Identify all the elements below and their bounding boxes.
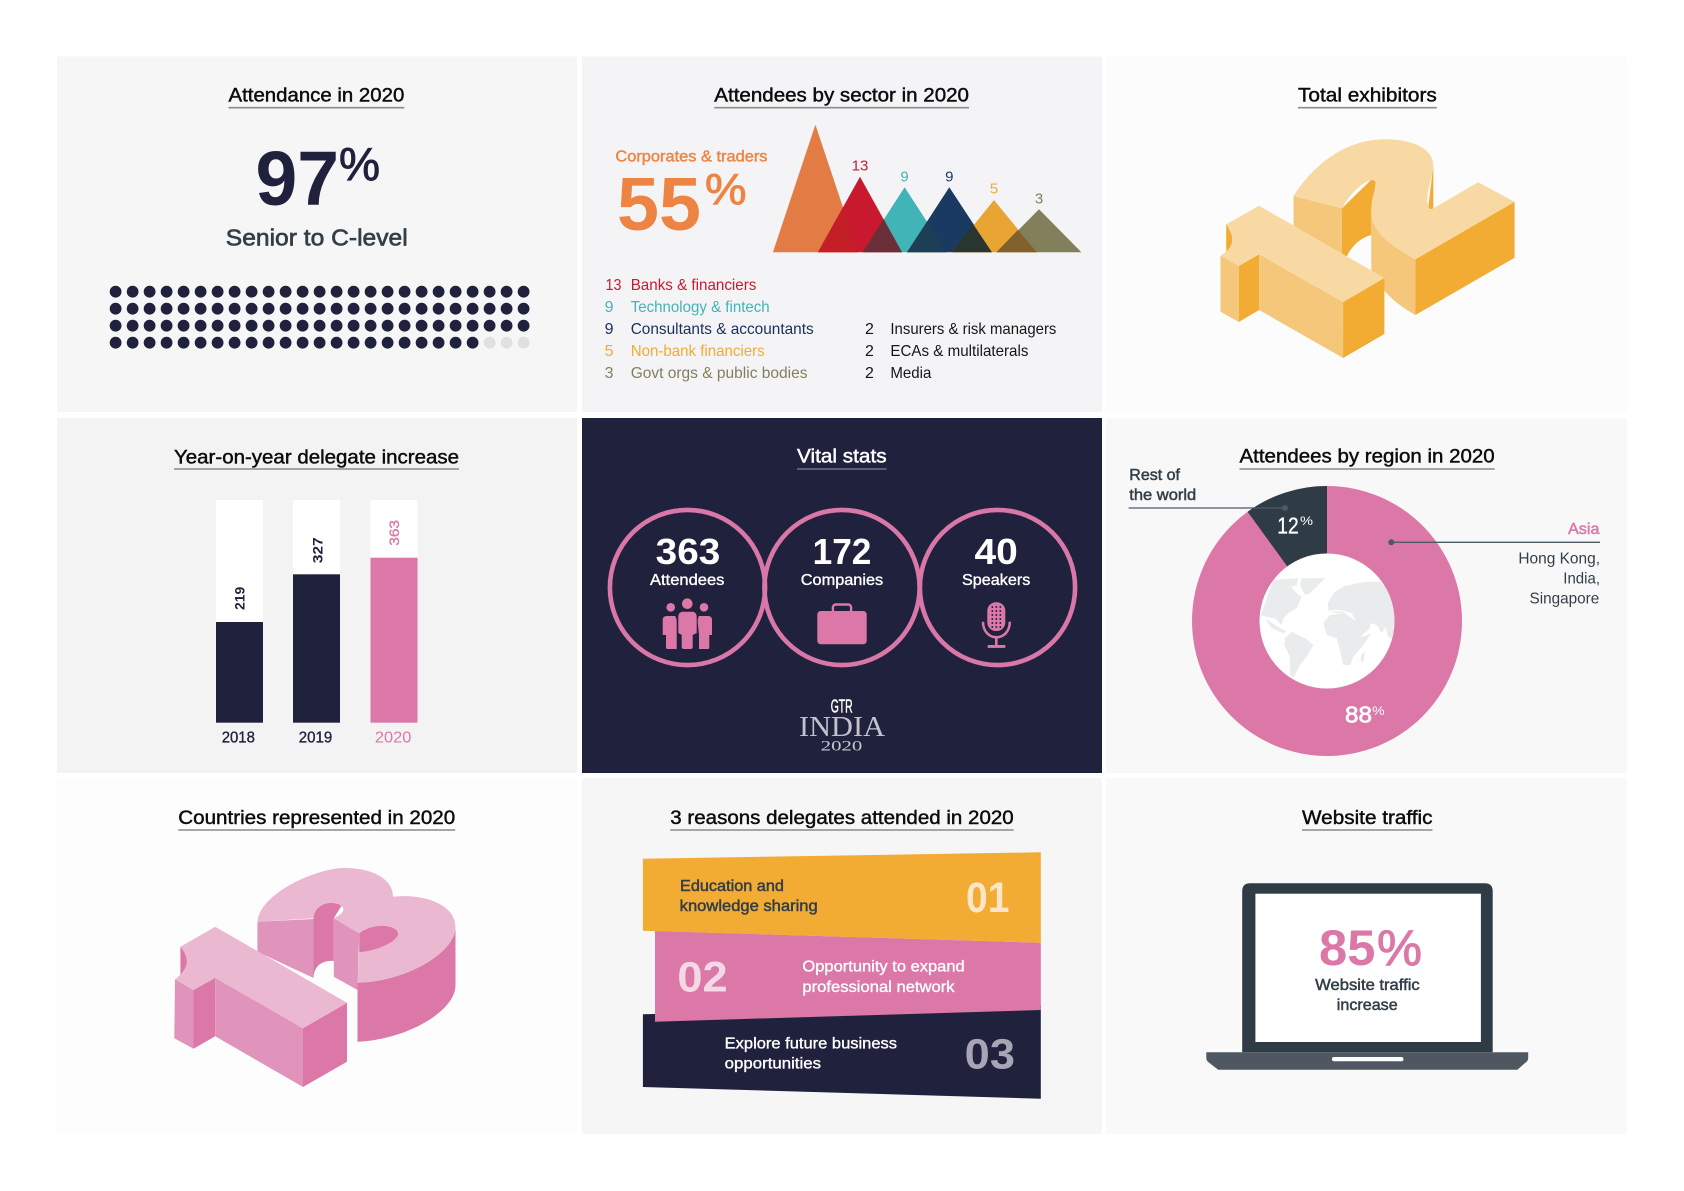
callout: corporates and traders 55 percent: 55 xyxy=(617,162,701,246)
legend: major sectors: 3 xyxy=(605,365,614,382)
bar: 2019: 327 xyxy=(310,537,326,563)
stat circle: attendees: Attendees xyxy=(650,572,724,589)
logo: GTR India 2020 xyxy=(799,695,886,755)
bar: 2020 xyxy=(370,500,418,746)
band: reason 01 xyxy=(643,852,1041,943)
stat circle: attendees xyxy=(610,510,765,665)
heading: 3 reasons: 3 reasons delegates attended in 2020 xyxy=(670,807,1014,829)
stat circle: attendees: 363 xyxy=(656,531,720,572)
chart: sector triangles: 3 xyxy=(1035,191,1043,208)
legend: major sectors: Technology & fintech xyxy=(631,299,770,316)
band: reason 03 xyxy=(643,1005,1041,1099)
chart: sector triangles: 5 xyxy=(990,180,998,197)
callout: Asia: Hong Kong, xyxy=(1518,550,1600,567)
chart: sector triangles: 9 xyxy=(945,169,953,186)
logo: GTR India 2020: GTR xyxy=(831,695,853,716)
band: reason 01: knowledge sharing xyxy=(680,898,818,915)
panel: countries represented xyxy=(57,778,577,1134)
label: 88 percent: % xyxy=(1372,704,1385,718)
chart: sector triangles: 9 xyxy=(900,169,909,186)
bar: 2019 xyxy=(293,500,340,746)
band: reason 02: Opportunity to expand xyxy=(802,959,965,976)
band: reason 01: 01 xyxy=(966,874,1010,922)
callout: corporates and traders 55 percent: Corporates & traders xyxy=(615,149,768,166)
text: website traffic increase xyxy=(1315,977,1420,1014)
heading: countries represented: Countries represented in 2020 xyxy=(178,807,455,829)
band: reason 02 xyxy=(655,931,1041,1022)
band: reason 03: Explore future business xyxy=(725,1036,897,1053)
bar: 2020: 2020 xyxy=(375,729,412,746)
legend: major sectors xyxy=(605,277,814,382)
logo: GTR India 2020: 2020 xyxy=(821,739,862,755)
stat: 97 percent: % xyxy=(339,138,380,190)
legend: major sectors: Banks & financiers xyxy=(631,277,756,294)
stat: 85 percent xyxy=(1319,920,1422,976)
stat circle: companies xyxy=(764,510,920,665)
band: reason 03: 03 xyxy=(965,1031,1015,1079)
label: 88 percent xyxy=(1345,701,1385,727)
callout: rest of the world: Rest of xyxy=(1129,467,1181,484)
callout: Asia: India, xyxy=(1563,570,1600,587)
illustration: laptop xyxy=(1206,883,1528,1070)
bar: 2018 xyxy=(216,500,263,746)
illustration: isometric number 12 xyxy=(1220,139,1515,358)
text: website traffic increase: Website traffic xyxy=(1315,977,1420,994)
legend: major sectors: 5 xyxy=(605,343,614,360)
chart: donut xyxy=(1192,486,1462,756)
callout: rest of the world xyxy=(1129,467,1288,511)
stat: 97 percent: 97 xyxy=(256,136,339,222)
callout: rest of the world: the world xyxy=(1129,487,1196,504)
text: senior to C-level: Senior to C-level xyxy=(226,225,408,251)
legend: major sectors: Non-bank financiers xyxy=(631,343,765,360)
bar: 2018: 219 xyxy=(231,586,247,610)
band: reason 02: professional network xyxy=(802,979,956,996)
callout: Asia: Singapore xyxy=(1530,590,1599,607)
icon: people xyxy=(663,598,712,649)
chart: sector triangles xyxy=(773,125,1081,252)
stat circle: speakers: Speakers xyxy=(962,572,1030,589)
label: 12 percent: % xyxy=(1300,514,1313,528)
stat: 85 percent: 85 xyxy=(1319,920,1375,976)
heading: website traffic: Website traffic xyxy=(1302,807,1433,829)
band: reason 03: opportunities xyxy=(725,1056,821,1073)
heading: vital stats: Vital stats xyxy=(797,446,887,468)
panel: website traffic xyxy=(1106,778,1627,1134)
chart: sector triangles: 13 xyxy=(852,158,868,175)
heading: total exhibitors: Total exhibitors xyxy=(1298,85,1437,107)
legend: minor sectors: Insurers & risk managers xyxy=(890,321,1056,338)
heading: attendance in 2020: Attendance in 2020 xyxy=(228,85,404,107)
dot matrix: 97 of 100 xyxy=(116,292,524,343)
callout: corporates and traders 55 percent: % xyxy=(705,165,746,214)
bar: 2019: 2019 xyxy=(299,729,332,746)
callout: Asia xyxy=(1388,521,1600,607)
stat circle: speakers: 40 xyxy=(974,531,1018,572)
illustration: isometric number 13 xyxy=(174,868,456,1087)
panel: 3 reasons delegates attended xyxy=(582,778,1102,1134)
legend: minor sectors: ECAs & multilaterals xyxy=(890,343,1028,360)
callout: corporates and traders 55 percent xyxy=(615,149,768,246)
text: website traffic increase: increase xyxy=(1337,997,1398,1014)
legend: minor sectors: 2 xyxy=(865,365,874,382)
label: 88 percent: 88 xyxy=(1345,701,1372,727)
legend: major sectors: Govt orgs & public bodies xyxy=(631,365,808,382)
panel: attendees by region xyxy=(1128,448,1600,756)
band: reason 02: 02 xyxy=(677,953,728,1001)
heading: attendees by region: Attendees by region in 2020 xyxy=(1240,446,1495,468)
band: reason 01: Education and xyxy=(680,878,784,895)
legend: major sectors: 13 xyxy=(606,277,622,294)
legend: minor sectors xyxy=(865,321,1056,382)
stat circle: companies: Companies xyxy=(801,572,883,589)
icon: briefcase xyxy=(817,604,867,644)
stat circle: speakers xyxy=(920,510,1075,665)
panel: total exhibitors xyxy=(1106,56,1627,412)
panel: attendees by sector xyxy=(582,56,1102,412)
panel: year-on-year delegate increase xyxy=(57,418,577,773)
stat: 97 percent xyxy=(256,136,380,222)
legend: major sectors: 9 xyxy=(605,321,614,338)
bar: 2018: 2018 xyxy=(222,729,255,746)
legend: minor sectors: 2 xyxy=(865,321,874,338)
stat: 85 percent: % xyxy=(1377,920,1422,976)
legend: minor sectors: 2 xyxy=(865,343,874,360)
heading: year-on-year: Year-on-year delegate increase xyxy=(174,446,459,468)
bar: 2020: 363 xyxy=(386,520,402,546)
heading: attendees by sector: Attendees by sector in 2020 xyxy=(714,85,969,107)
label: 12 percent: 12 xyxy=(1277,512,1299,538)
panel: vital stats xyxy=(582,418,1102,773)
logo: GTR India 2020: INDIA xyxy=(799,712,886,743)
callout: Asia: Asia xyxy=(1568,521,1600,538)
legend: minor sectors: Media xyxy=(890,365,931,382)
icon: microphone xyxy=(983,602,1010,648)
stat circle: companies: 172 xyxy=(813,531,871,572)
panel: attendance in 2020 xyxy=(57,56,577,412)
map: world xyxy=(1261,578,1394,678)
legend: major sectors: Consultants & accountants xyxy=(631,321,814,338)
legend: major sectors: 9 xyxy=(605,299,614,316)
